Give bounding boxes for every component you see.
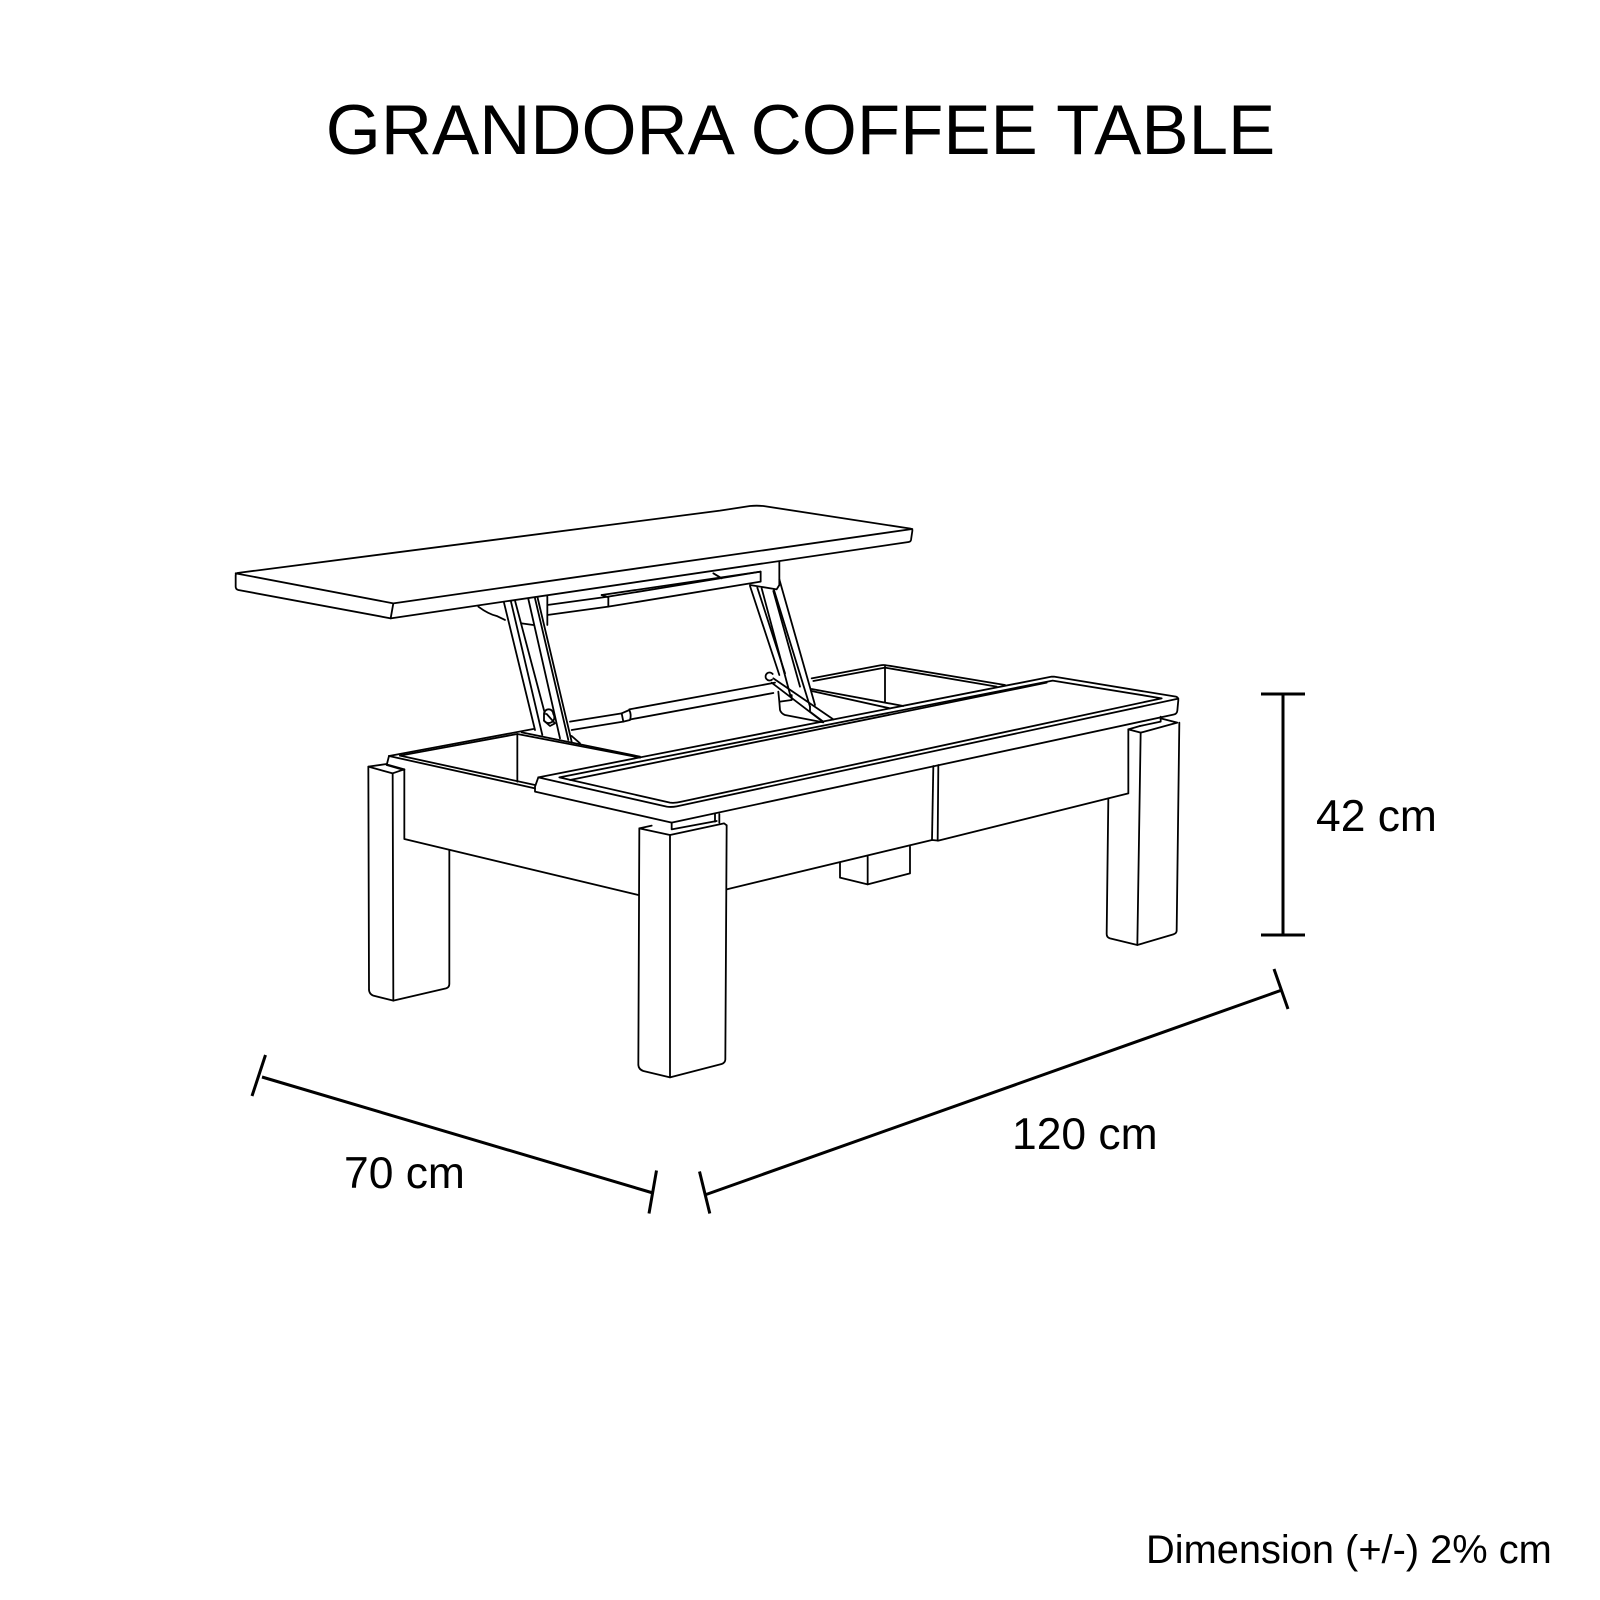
- left storage compartment: [387, 729, 640, 788]
- title: GRANDORA COFFEE TABLE: [326, 91, 1275, 170]
- dimension: height 42 cm: 42 cm: [1316, 792, 1437, 841]
- dimension: depth 70 cm: [252, 1055, 656, 1214]
- dimension: height 42 cm: [1261, 694, 1437, 935]
- long apron, divider and back leg: [727, 729, 1128, 889]
- fixed front tray top: [535, 677, 1178, 823]
- under-top sliding rail: [547, 572, 761, 615]
- raised lift top: [236, 506, 912, 618]
- dimension: width 120 cm: [700, 969, 1288, 1214]
- dimension: width 120 cm: 120 cm: [1012, 1110, 1158, 1159]
- right lift mechanism: [750, 562, 833, 722]
- gas strut rods: [570, 683, 775, 730]
- illustration: coffee table line drawing: [236, 506, 1179, 1077]
- front left leg and end apron: [368, 764, 638, 1001]
- right leg: [1107, 717, 1179, 945]
- dimension: depth 70 cm: 70 cm: [344, 1149, 465, 1198]
- right storage compartment: [812, 665, 1005, 708]
- left lift mechanism: [478, 597, 580, 743]
- tolerance note: Dimension (+/-) 2% cm: [1146, 1528, 1552, 1572]
- front centre leg: [638, 814, 727, 1077]
